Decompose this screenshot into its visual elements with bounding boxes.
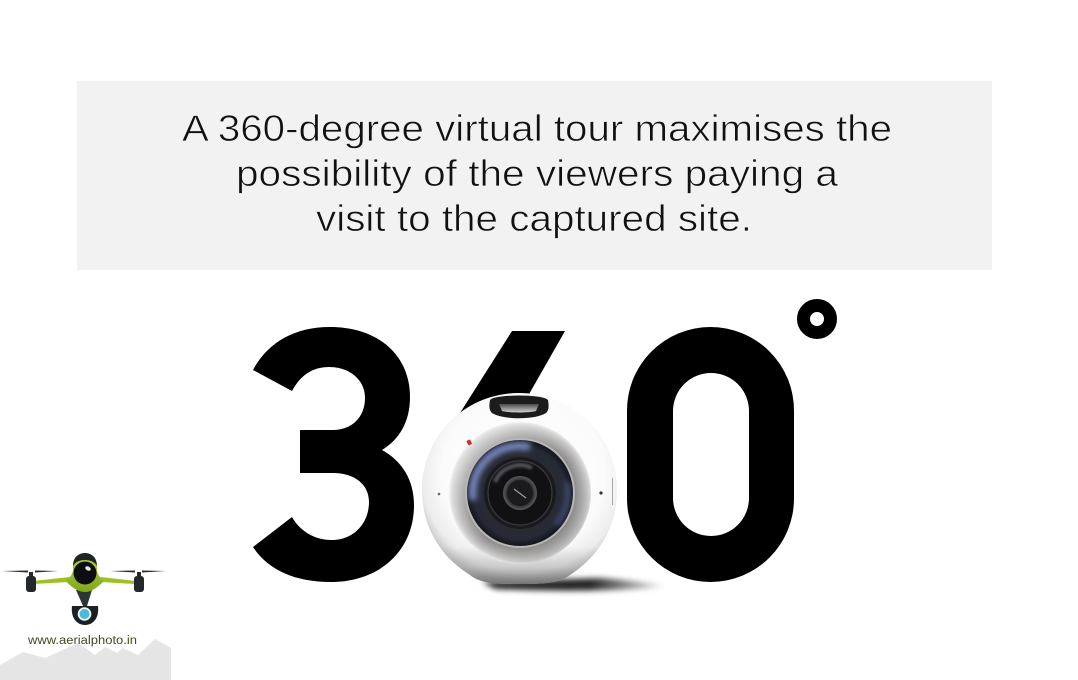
panel: statement [77, 81, 992, 270]
logo: aerialphoto drone [0, 553, 171, 680]
statement text: A 360-degree virtual tour maximises the [182, 108, 892, 149]
statement text: possibility of the viewers paying a [236, 153, 838, 194]
motors [26, 572, 144, 592]
arms [33, 577, 135, 584]
rear lens bump [489, 396, 549, 418]
body [66, 554, 104, 592]
eye lens [74, 562, 96, 584]
digit 6 stroke [460, 331, 565, 413]
silver lens ring [449, 422, 591, 564]
degree symbol [804, 306, 830, 332]
mountain silhouette [0, 639, 171, 680]
rotors [2, 570, 166, 572]
camera shadow [482, 578, 665, 591]
drone [2, 553, 166, 625]
red indicator [466, 439, 472, 446]
camera body [422, 393, 617, 584]
camera stem [76, 590, 92, 606]
digit 3 [253, 327, 414, 582]
front glass [466, 440, 574, 546]
camera underside shading [438, 546, 600, 584]
gimbal camera [72, 606, 98, 625]
digit 0 [627, 327, 794, 582]
side dots [438, 478, 613, 505]
large 360 degree graphic [253, 306, 830, 582]
head cap [73, 553, 97, 566]
blue reflections [472, 446, 530, 500]
statement text [182, 108, 892, 239]
icon: 360 camera [422, 393, 617, 584]
statement text: visit to the captured site. [316, 198, 752, 239]
website url: www.aerialphoto.in [27, 635, 137, 647]
inner elements [484, 457, 556, 529]
